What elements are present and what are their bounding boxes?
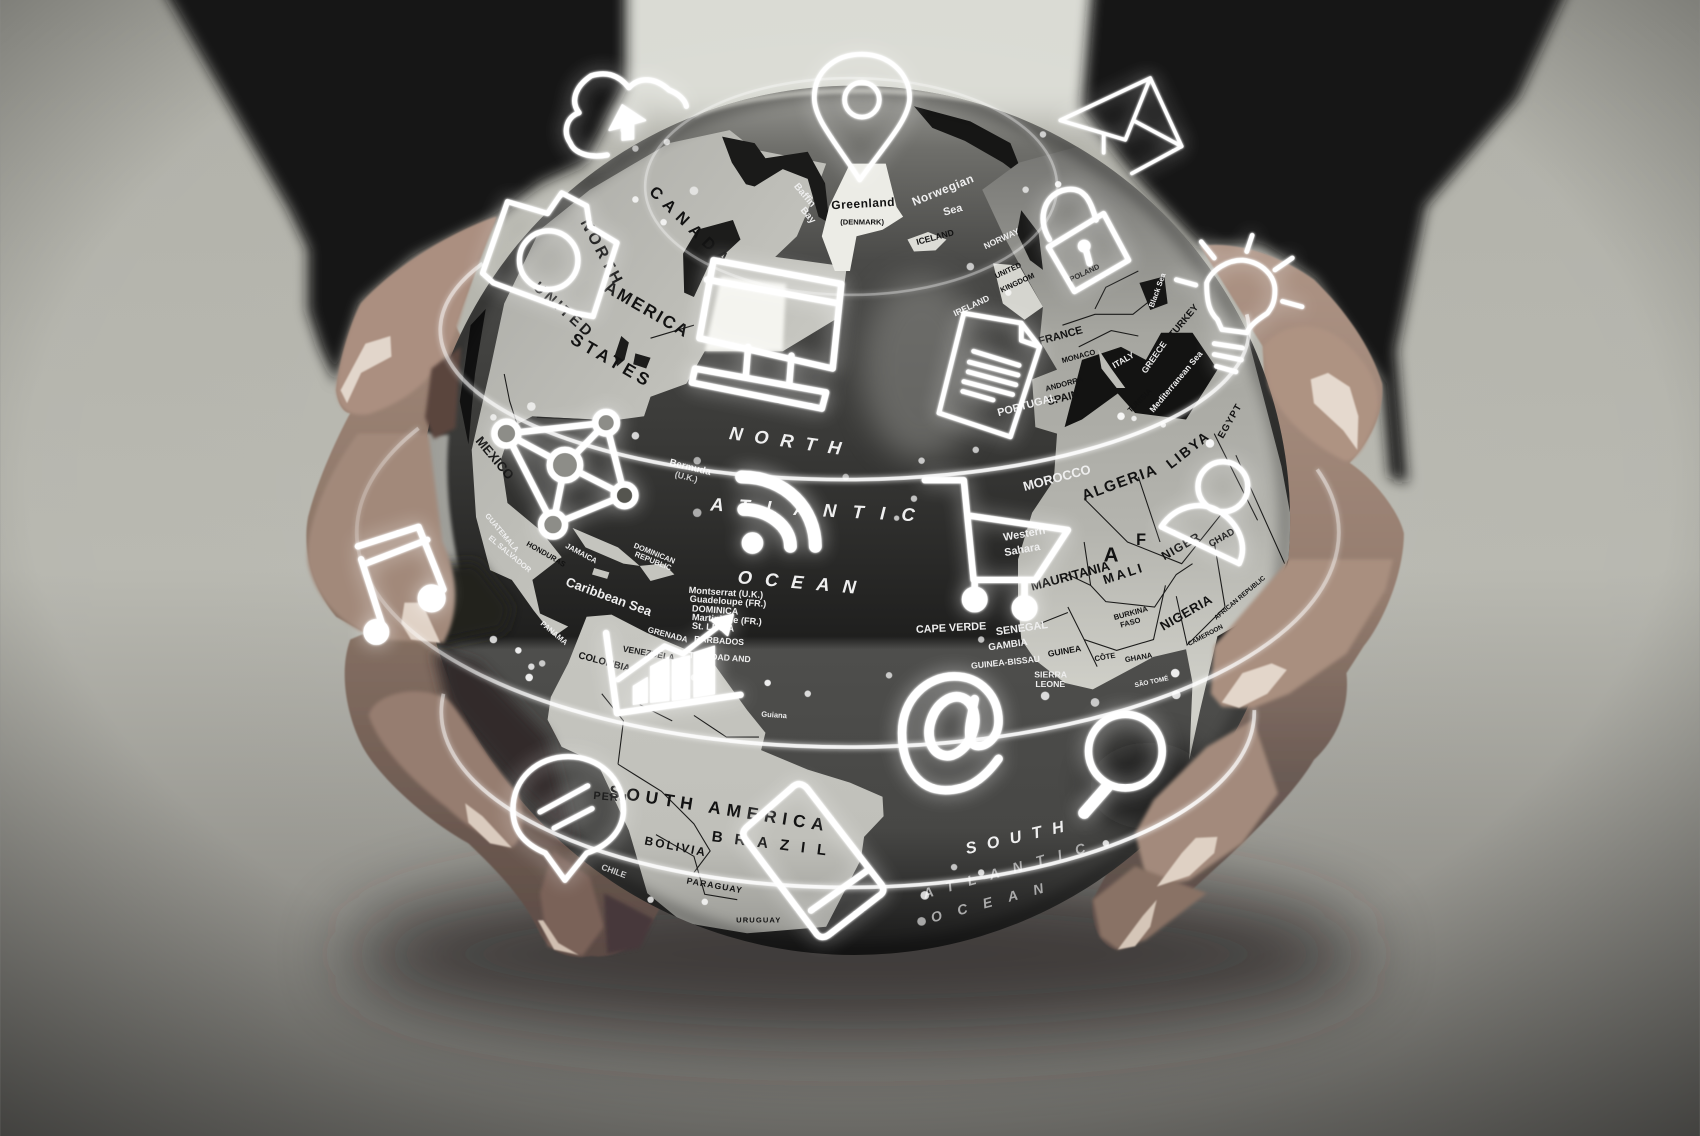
label: South Atlantic: Atlantic: ATLANTIC: [920, 836, 1101, 902]
label: Gambia: GAMBIA: [988, 637, 1028, 653]
label: North Atlantic: Ocean: OCEAN: [737, 566, 870, 599]
left finger: lower: [369, 691, 522, 848]
orbit rings: [357, 78, 1339, 887]
label: Peru: PERU: [593, 790, 628, 805]
left finger: middle: [307, 434, 455, 643]
land: Caribbean islands: [573, 528, 674, 581]
shadow of middle left finger on globe: [439, 561, 512, 645]
shadow of left hand under fingers: [434, 650, 575, 845]
label: Grenada: GRENADA: [647, 625, 689, 645]
label: Baffin: Baffin: [791, 181, 818, 210]
label: Western Sahara: Western: [1002, 525, 1046, 544]
label: South America: SOUTH AMERICA: [608, 781, 831, 836]
label: Chad: CHAD: [1207, 526, 1237, 550]
country borders: [504, 271, 1285, 900]
sea: Arctic dark patch: [914, 106, 1018, 168]
sea: Arctic channels: [722, 137, 829, 223]
globe: silver left rim: [434, 434, 447, 575]
label: Trinidad: TRINIDAD AND: [688, 650, 751, 664]
label: Barbados: BARBADOS: [694, 634, 745, 647]
label: Mediterranean Sea: Mediterranean Sea: [1147, 349, 1205, 414]
sea: Mediterranean: [1065, 333, 1217, 427]
label: Chile: CHILE: [600, 862, 628, 880]
label: Nigeria: NIGERIA: [1157, 591, 1215, 633]
label: Iceland: ICELAND: [915, 227, 955, 247]
label: Guatemala: GUATEMALA: [483, 511, 521, 554]
icon: shopping cart: [925, 480, 1068, 618]
label: Paraguay: PARAGUAY: [686, 876, 744, 895]
fingernail: right lower: [1157, 837, 1217, 887]
fingernail: right middle: [1222, 663, 1287, 708]
label: South Atlantic: Ocean: OCEAN: [929, 876, 1061, 925]
icon: document: [939, 313, 1040, 437]
label: Ireland: IRELAND: [952, 293, 991, 318]
label: French Guiana: Guiana: [761, 710, 788, 720]
icon: location pin: [814, 54, 910, 180]
label: Guadeloupe: Guadeloupe (FR.): [689, 594, 767, 609]
label: Jamaica: JAMAICA: [564, 541, 599, 566]
label: Norway: NORWAY: [982, 226, 1021, 251]
label: Dominica: DOMINICA: [692, 603, 739, 617]
label: Mali: MALI: [1101, 560, 1146, 587]
fingernail: right upper: [1311, 373, 1358, 450]
label: North Atlantic: Atlantic: ATLANTIC: [709, 494, 931, 526]
icon: speech bubble: [513, 757, 623, 880]
sea: Great Lakes: [615, 336, 651, 369]
label: El Salvador: EL SALVADOR: [487, 533, 533, 575]
land: bright Labrador under monitor: [705, 276, 786, 351]
label: Sao Tome: SÃO TOMÉ: [1134, 673, 1170, 689]
label: Norwegian: Norwegian: [910, 171, 976, 209]
label: Cameroon: CAMEROON: [1187, 623, 1225, 648]
land: Iceland: [907, 232, 946, 251]
sea: Black Sea: [1139, 276, 1168, 310]
label: Caribbean Sea: Caribbean Sea: [564, 574, 655, 619]
land: Italy: [1098, 349, 1125, 388]
icon: cloud upload: [566, 74, 686, 156]
label: Guinea: GUINEA: [1047, 643, 1083, 659]
label: South Atlantic: South: SOUTH: [964, 816, 1076, 858]
ring 2: [440, 263, 1249, 480]
right finger: middle: [1211, 559, 1393, 708]
label: Bay: Bay: [798, 205, 818, 226]
icon: person: [1161, 462, 1248, 564]
fingernail: left middle: [401, 603, 440, 643]
icon: network triangle: [494, 412, 635, 537]
label: Venezuela: VENEZUELA: [622, 644, 676, 663]
land: North America: [472, 130, 847, 636]
label: France: FRANCE: [1037, 324, 1084, 348]
right finger: lower: [1135, 720, 1278, 888]
label: States: STATES: [567, 329, 657, 392]
label: Honduras: HONDURAS: [525, 539, 567, 569]
sea: Gulf of California band: [460, 309, 486, 444]
left fold shadow: [425, 347, 461, 439]
label: Spain: SPAIN: [1046, 388, 1081, 408]
label: Africa F: F: [1136, 531, 1146, 549]
label: Canada: CANADA: [646, 183, 737, 272]
map labels: [473, 171, 1267, 925]
fingernail: left lower: [465, 803, 512, 848]
label: Colombia: COLOMBIA: [577, 650, 631, 675]
label: Republic: REPUBLIC: [634, 550, 673, 573]
label: Greece: GREECE: [1139, 339, 1169, 375]
ring 4: [441, 694, 1254, 887]
icon: smartphone: [743, 784, 883, 937]
label: Andorra: ANDORRA: [1044, 374, 1085, 393]
label: Poland: POLAND: [1068, 262, 1101, 284]
icon: padlock: [1043, 189, 1129, 292]
digital icons: [358, 54, 1302, 937]
label: Turkey: TURKEY: [1167, 302, 1201, 340]
fingernail: left upper: [341, 336, 391, 403]
ring 3: [357, 428, 1339, 747]
label: Sahara: Sahara: [1003, 541, 1042, 559]
label: Egypt: EGYPT: [1216, 402, 1245, 441]
label: Brazil: BRAZIL: [711, 828, 839, 861]
label: Central African Republic: AFRICAN REPUBLIC: [1213, 575, 1267, 622]
label: America: AMERICA: [601, 277, 694, 342]
globe: silver top rim: [694, 91, 1041, 117]
land: Europe and Africa: [982, 146, 1296, 760]
label: Greenland: Greenland: [831, 195, 895, 212]
label: Algeria: ALGERIA: [1080, 461, 1160, 505]
sea: Baltic: [1017, 210, 1043, 270]
right finger: bottom: [1093, 866, 1207, 950]
globe: [412, 76, 1301, 965]
label: Portugal: PORTUGAL: [996, 392, 1058, 419]
globe: rim shade: [423, 90, 1286, 951]
icon: computer monitor: [692, 260, 841, 409]
icon: magnifier: [1084, 714, 1162, 813]
label: Panama: PANAMA: [539, 619, 570, 647]
left finger: shadow palm: [604, 893, 654, 954]
icon: at sign: [902, 676, 999, 790]
label: Uruguay: URUGUAY: [736, 915, 781, 924]
label: Bermuda: Bermuda: [668, 457, 712, 478]
label: Martinique: Martinique (FR.): [692, 612, 762, 627]
land: Greenland: [822, 164, 903, 271]
label: Monaco: MONACO: [1061, 347, 1096, 365]
land: Britain: [993, 263, 1043, 320]
label: Bolivia: BOLIVIA: [643, 834, 708, 859]
label: Dominican Republic: DOMINICAN: [632, 541, 676, 566]
label: Morocco: MOROCCO: [1021, 461, 1092, 494]
fingernail: right bottom: [1118, 900, 1157, 950]
label: Niger: NIGER: [1159, 529, 1203, 563]
data particles: [490, 127, 1214, 926]
left finger: bottom: [540, 851, 604, 956]
label: Montserrat: Montserrat (U.K.): [688, 585, 764, 600]
label: Tunisia: TUNISIA: [1126, 386, 1154, 414]
right finger: upper: [1263, 326, 1378, 461]
label: St Lucia: St. LUCIA: [692, 621, 735, 634]
icon: wifi: [742, 477, 815, 551]
fingers: [307, 217, 1393, 956]
label: Ghana: GHANA: [1124, 650, 1154, 664]
icon: music note: [358, 527, 444, 642]
icon: camera: [483, 193, 617, 317]
label: Ivory Coast: CÔTE: [1094, 651, 1116, 663]
label: Africa A: A: [1104, 543, 1119, 566]
left sleeve: [157, 0, 626, 383]
land: South America: [548, 615, 884, 933]
label: United: UNITED: [530, 279, 598, 342]
left hand base: [306, 217, 694, 957]
icon: envelope: [1060, 78, 1182, 173]
label: Cape Verde: CAPE VERDE: [916, 620, 987, 636]
label: Senegal: SENEGAL: [995, 619, 1049, 638]
label: Mexico: MEXICO: [473, 433, 517, 482]
label: United Kingdom: UNITED: [993, 260, 1023, 280]
label: Burkina: BURKINA: [1113, 604, 1149, 622]
label: Sea: Sea: [942, 202, 965, 219]
label: UK: (U.K.): [674, 469, 699, 484]
left finger: upper: [336, 217, 497, 415]
label: North Atlantic: North: NORTH: [728, 422, 854, 460]
label: Libya: LIBYA: [1163, 427, 1214, 472]
sea: Hudson Bay: [683, 220, 741, 297]
label: Black Sea: Black Sea: [1147, 271, 1168, 309]
label: Sierra: SIERRA: [1034, 669, 1068, 679]
label: Faso: FASO: [1119, 615, 1142, 630]
label: Kingdom: KINGDOM: [999, 271, 1036, 294]
ocean light patch: [862, 276, 981, 461]
label: Guinea-Bissau: GUINEA-BISSAU: [971, 654, 1040, 671]
right sleeve: [1082, 0, 1572, 483]
label: Italy: ITALY: [1110, 350, 1136, 370]
icon: light bulb: [1176, 235, 1302, 372]
label: Mauritania: MAURITANIA: [1029, 558, 1112, 594]
label: North: NORTH: [577, 216, 627, 289]
icon: bar chart: [606, 615, 741, 713]
fingernail: left bottom: [538, 920, 579, 955]
label: Leone: LEONE: [1035, 679, 1065, 689]
ocean lower right shade: [1090, 743, 1209, 829]
label: Denmark: (DENMARK): [840, 217, 884, 226]
right hand base: [1092, 245, 1404, 950]
ring 1: [645, 78, 1057, 295]
